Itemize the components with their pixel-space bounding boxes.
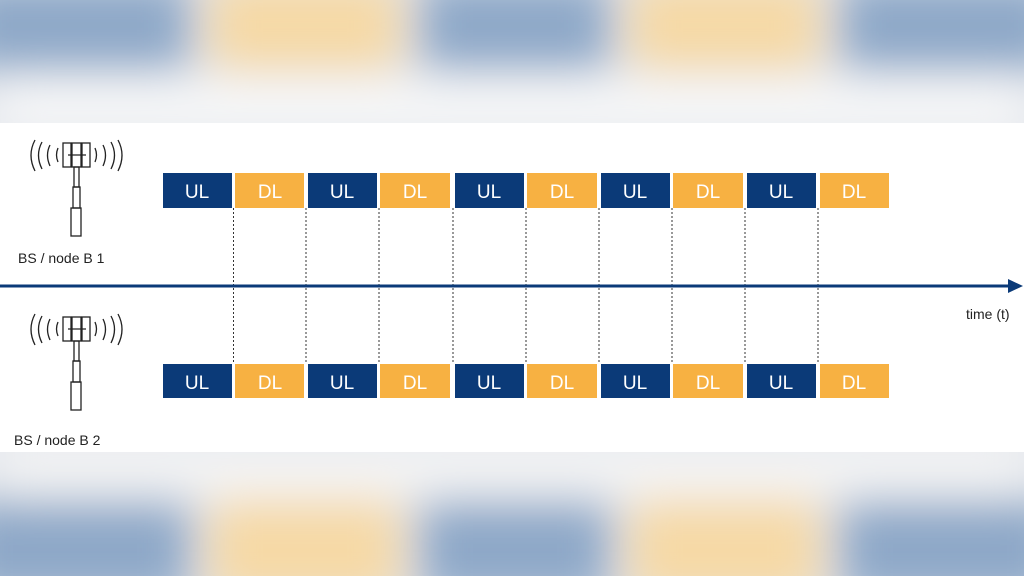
row: node B 1 frames: DL xyxy=(403,182,427,203)
row: node B 2 frames: UL xyxy=(623,373,647,394)
row: node B 2 frames: DL xyxy=(403,373,427,394)
row: node B 2 frames: DL xyxy=(550,373,574,394)
row: node B 1 frames: DL xyxy=(696,182,720,203)
icon: base station 2 xyxy=(31,314,122,410)
row: node B 2 frames: UL xyxy=(769,373,793,394)
row: node B 2 frames: UL xyxy=(477,373,501,394)
row: node B 2 frames: UL xyxy=(330,373,354,394)
row: node B 1 frames: UL xyxy=(330,182,354,203)
row: node B 1 frames: DL xyxy=(258,182,282,203)
dashed slot dividers xyxy=(234,208,818,364)
row: node B 2 frames: DL xyxy=(258,373,282,394)
row: node B 1 frames: UL xyxy=(623,182,647,203)
row: node B 1 frames: DL xyxy=(550,182,574,203)
row: node B 1 frames xyxy=(163,173,889,208)
row: node B 2 frames: DL xyxy=(842,373,866,394)
row: node B 2 frames xyxy=(163,364,889,398)
row: node B 2 frames: DL xyxy=(696,373,720,394)
row: node B 1 frames: UL xyxy=(769,182,793,203)
row: node B 1 frames: UL xyxy=(185,182,209,203)
row: node B 1 frames: DL xyxy=(842,182,866,203)
row: node B 2 frames: UL xyxy=(185,373,209,394)
icon: base station 1 xyxy=(31,140,122,236)
time axis arrow xyxy=(0,279,1023,293)
label: BS 1: BS / node B 1 xyxy=(18,250,105,266)
label: BS 2: BS / node B 2 xyxy=(14,432,101,448)
row: node B 1 frames: UL xyxy=(477,182,501,203)
main white panel xyxy=(0,123,1024,452)
axis label: time (t) xyxy=(966,306,1010,322)
